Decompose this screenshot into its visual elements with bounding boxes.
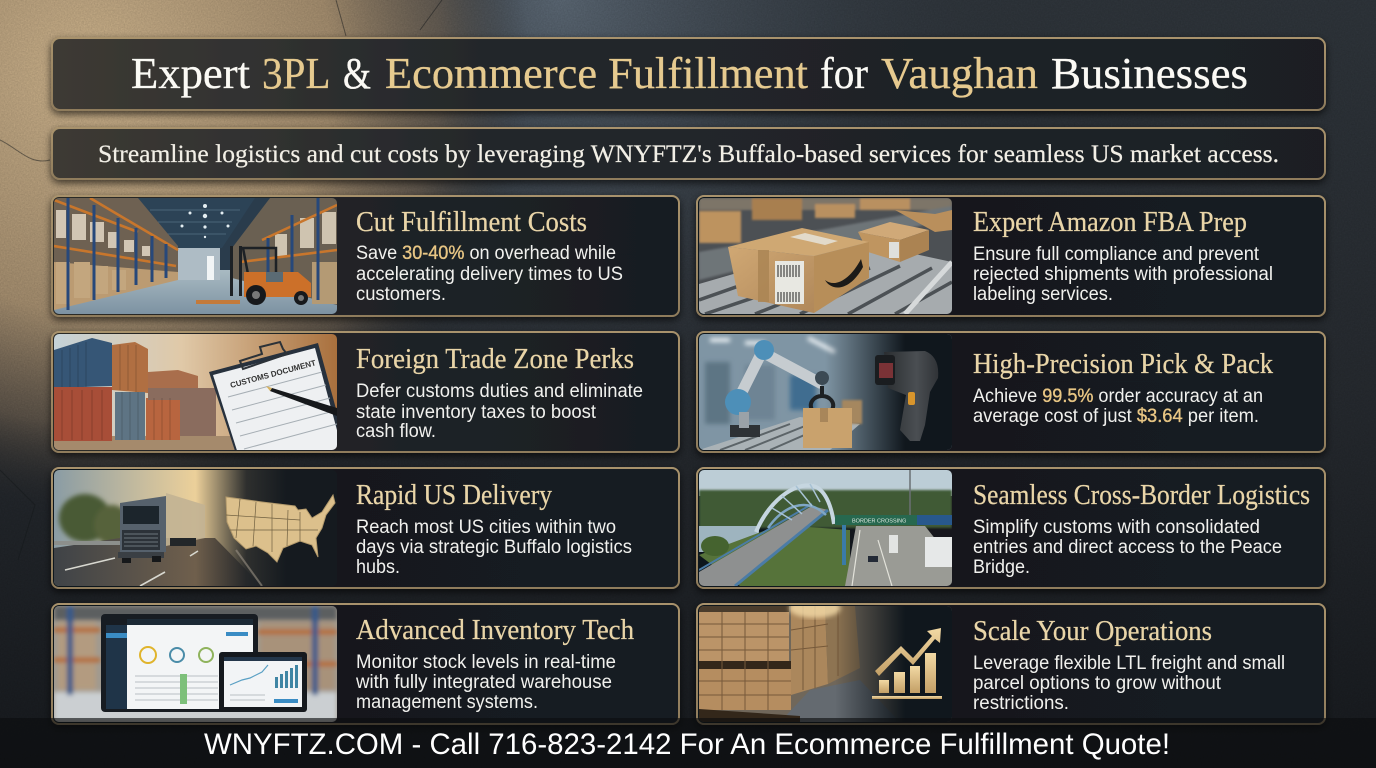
body text [973, 244, 1273, 305]
barcode scanner [875, 351, 938, 441]
truck [118, 493, 205, 563]
body text: days via strategic Buffalo logistics [356, 537, 632, 558]
tablet [219, 652, 307, 712]
body text [356, 381, 643, 442]
box [803, 408, 852, 448]
heading: Advanced Inventory Tech [356, 615, 634, 646]
body text [356, 243, 623, 305]
body text [973, 653, 1285, 714]
footer text: WNYFTZ.COM - Call 716-823-2142 For An Ecommerce Fulfillment Quote! [204, 728, 1170, 761]
big box [728, 228, 869, 313]
title banner [52, 38, 1325, 110]
subtitle banner [52, 128, 1325, 179]
body text: Leverage flexible LTL freight and small [973, 653, 1285, 674]
image: pallet stacks and growth chart [699, 598, 952, 722]
title text: 3PL [262, 49, 329, 98]
heading: High-Precision Pick & Pack [973, 349, 1273, 380]
image: bridge and border crossing [699, 470, 952, 586]
image: shipping containers and customs document [54, 334, 337, 450]
body text: Bridge. [973, 557, 1030, 578]
title text: Vaughan [881, 49, 1038, 98]
panel: Foreign Trade Zone Perks [52, 332, 679, 460]
panel: Advanced Inventory Tech [52, 604, 679, 724]
panel: Expert Amazon FBA Prep [697, 196, 1325, 316]
body text: with fully integrated warehouse [355, 672, 612, 693]
title text: & [343, 49, 371, 98]
forklift [196, 246, 311, 305]
body text: management systems. [356, 692, 538, 713]
clipboard [209, 340, 337, 450]
US map [226, 495, 335, 562]
body text: hubs. [356, 557, 400, 578]
clipboard: CUSTOMS DOCUMENT [229, 358, 317, 390]
left racks [54, 198, 178, 272]
right racks [232, 198, 337, 305]
monitor [101, 614, 258, 712]
panel: Rapid US Delivery [52, 468, 679, 588]
body text: Ensure full compliance and prevent [973, 244, 1260, 265]
body text: entries and direct access to the Peace [973, 537, 1282, 558]
image: warehouse with forklift [54, 198, 337, 314]
image: bridge and border crossing: BORDER CROSSING [852, 518, 906, 524]
heading: Rapid US Delivery [356, 480, 552, 511]
body text: Achieve 99.5% order accuracy at an [973, 386, 1263, 407]
heading: Foreign Trade Zone Perks [356, 344, 634, 375]
body text: Monitor stock levels in real-time [356, 652, 616, 673]
image: inventory dashboard on monitor and tablet [54, 606, 337, 722]
heading: Expert Amazon FBA Prep [973, 207, 1247, 238]
title text: Businesses [1051, 49, 1248, 98]
pallet stacks [699, 606, 860, 722]
body text: restrictions. [973, 693, 1069, 714]
body text: cash flow. [356, 421, 436, 442]
body text: Reach most US cities within two [356, 517, 616, 538]
panel: Cut Fulfillment Costs [52, 196, 679, 316]
panel: Scale Your Operations [697, 598, 1325, 724]
icon: growth chart [872, 628, 942, 699]
body text [355, 652, 616, 713]
panel: High-Precision Pick & Pack [697, 332, 1325, 452]
image: robot arm and barcode scanner [699, 334, 952, 450]
title text: for [820, 49, 868, 98]
body text: Defer customs duties and eliminate [356, 381, 643, 402]
image: Amazon box on conveyor [699, 198, 952, 314]
body text: customers. [356, 284, 446, 305]
robot arm [725, 340, 833, 437]
body text: parcel options to grow without [973, 673, 1222, 694]
body text [973, 517, 1282, 578]
body text [973, 386, 1263, 427]
subtitle text: Streamline logistics and cut costs by leveraging WNYFTZ's Buffalo-based services for seamless US market access. [98, 141, 1279, 168]
heading: Cut Fulfillment Costs [356, 207, 587, 238]
body text: rejected shipments with professional [973, 264, 1273, 285]
body text: Save 30-40% on overhead while [356, 243, 616, 264]
body text [356, 517, 632, 578]
body text: state inventory taxes to boost [356, 402, 597, 423]
image: truck on highway and US map [54, 470, 337, 586]
body text: Simplify customs with consolidated [973, 517, 1260, 538]
body text: labeling services. [973, 284, 1113, 305]
body text: average cost of just $3.64 per item. [973, 406, 1259, 427]
heading: Seamless Cross-Border Logistics [973, 480, 1310, 511]
body text: accelerating delivery times to US [356, 264, 623, 285]
panel: Seamless Cross-Border Logistics [697, 468, 1325, 588]
footer call to action bar [0, 718, 1376, 768]
heading: Scale Your Operations [973, 616, 1212, 647]
title text: Expert [131, 49, 250, 98]
title text: Ecommerce Fulfillment [385, 49, 808, 98]
